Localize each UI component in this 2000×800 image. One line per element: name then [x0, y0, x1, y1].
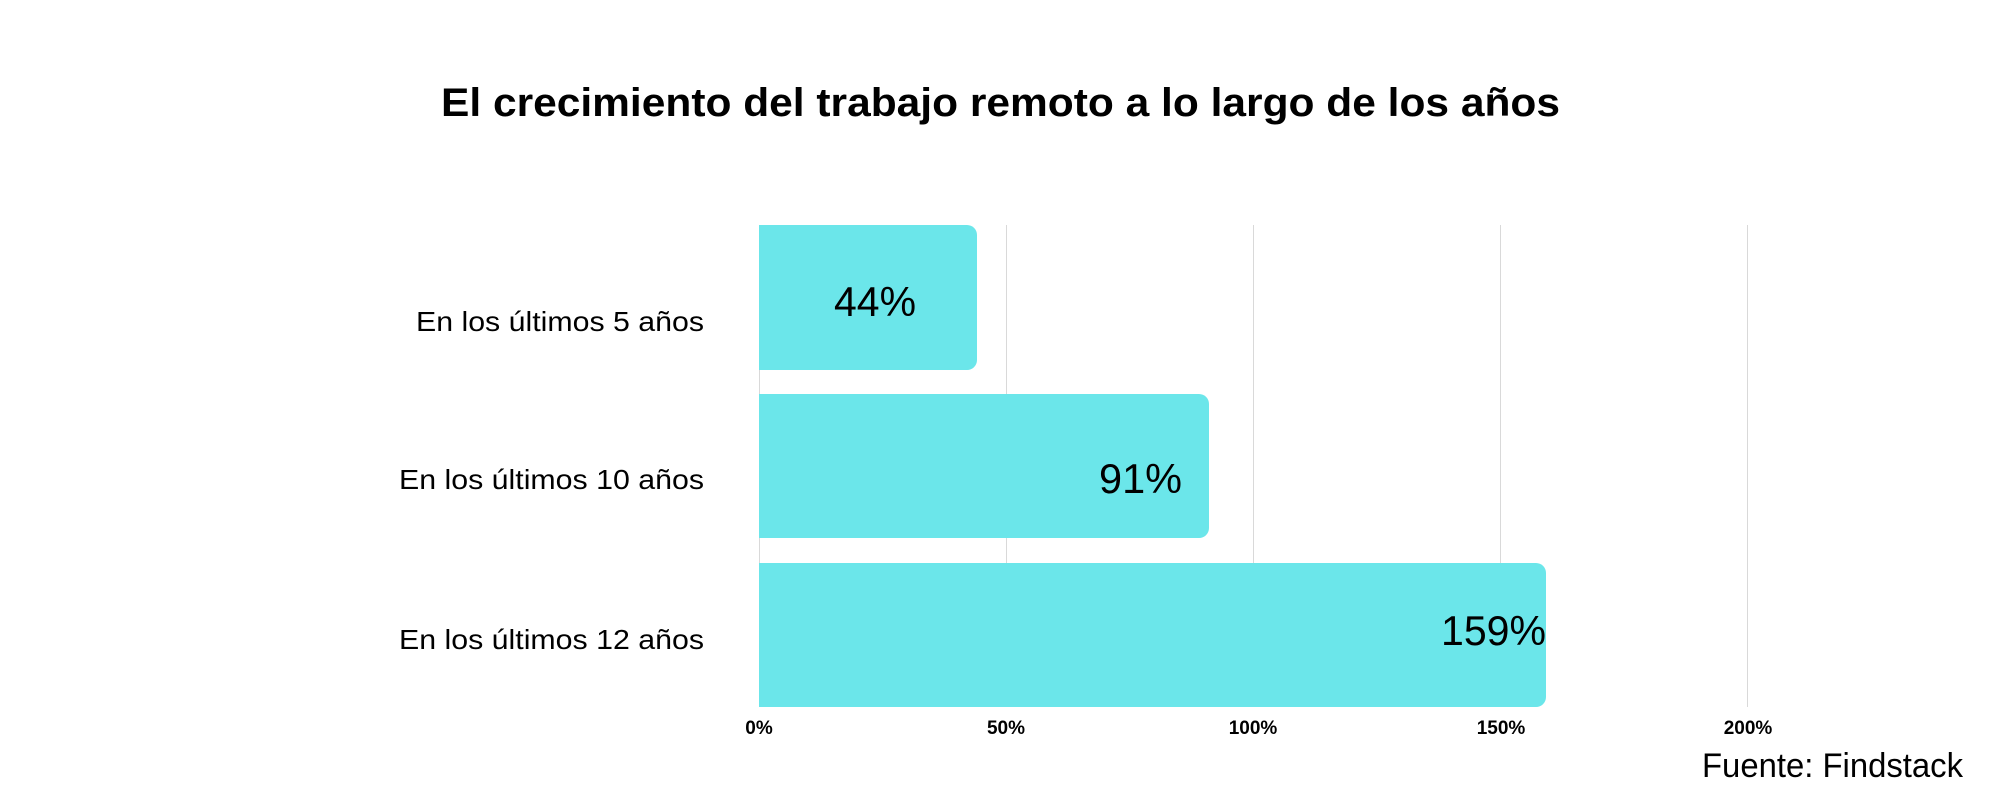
bar: 44%: [759, 225, 977, 370]
value: 44%: 44%: [834, 278, 916, 325]
title: El crecimiento del trabajo remoto a lo largo de los años: [441, 81, 1560, 125]
x axis labels: 50%: [987, 718, 1025, 739]
category label: 12 años: En los últimos 12 años: [399, 624, 704, 655]
category label: 5 años: En los últimos 5 años: [416, 306, 704, 337]
source note: Fuente: Findstack: [1702, 747, 1964, 785]
category label: 10 años: En los últimos 10 años: [399, 464, 704, 495]
x axis labels: 100%: [1229, 718, 1277, 739]
value: 91%: 91%: [1099, 455, 1182, 502]
bar: 159%: [759, 563, 1546, 707]
x axis labels: [745, 718, 1772, 739]
x axis labels: 0%: [745, 718, 773, 739]
value: 159%: 159%: [1441, 607, 1546, 654]
x axis labels: 150%: [1477, 718, 1525, 739]
bar: 91%: [759, 394, 1209, 538]
x axis labels: 200%: [1724, 718, 1772, 739]
bar chart: [759, 225, 1546, 707]
